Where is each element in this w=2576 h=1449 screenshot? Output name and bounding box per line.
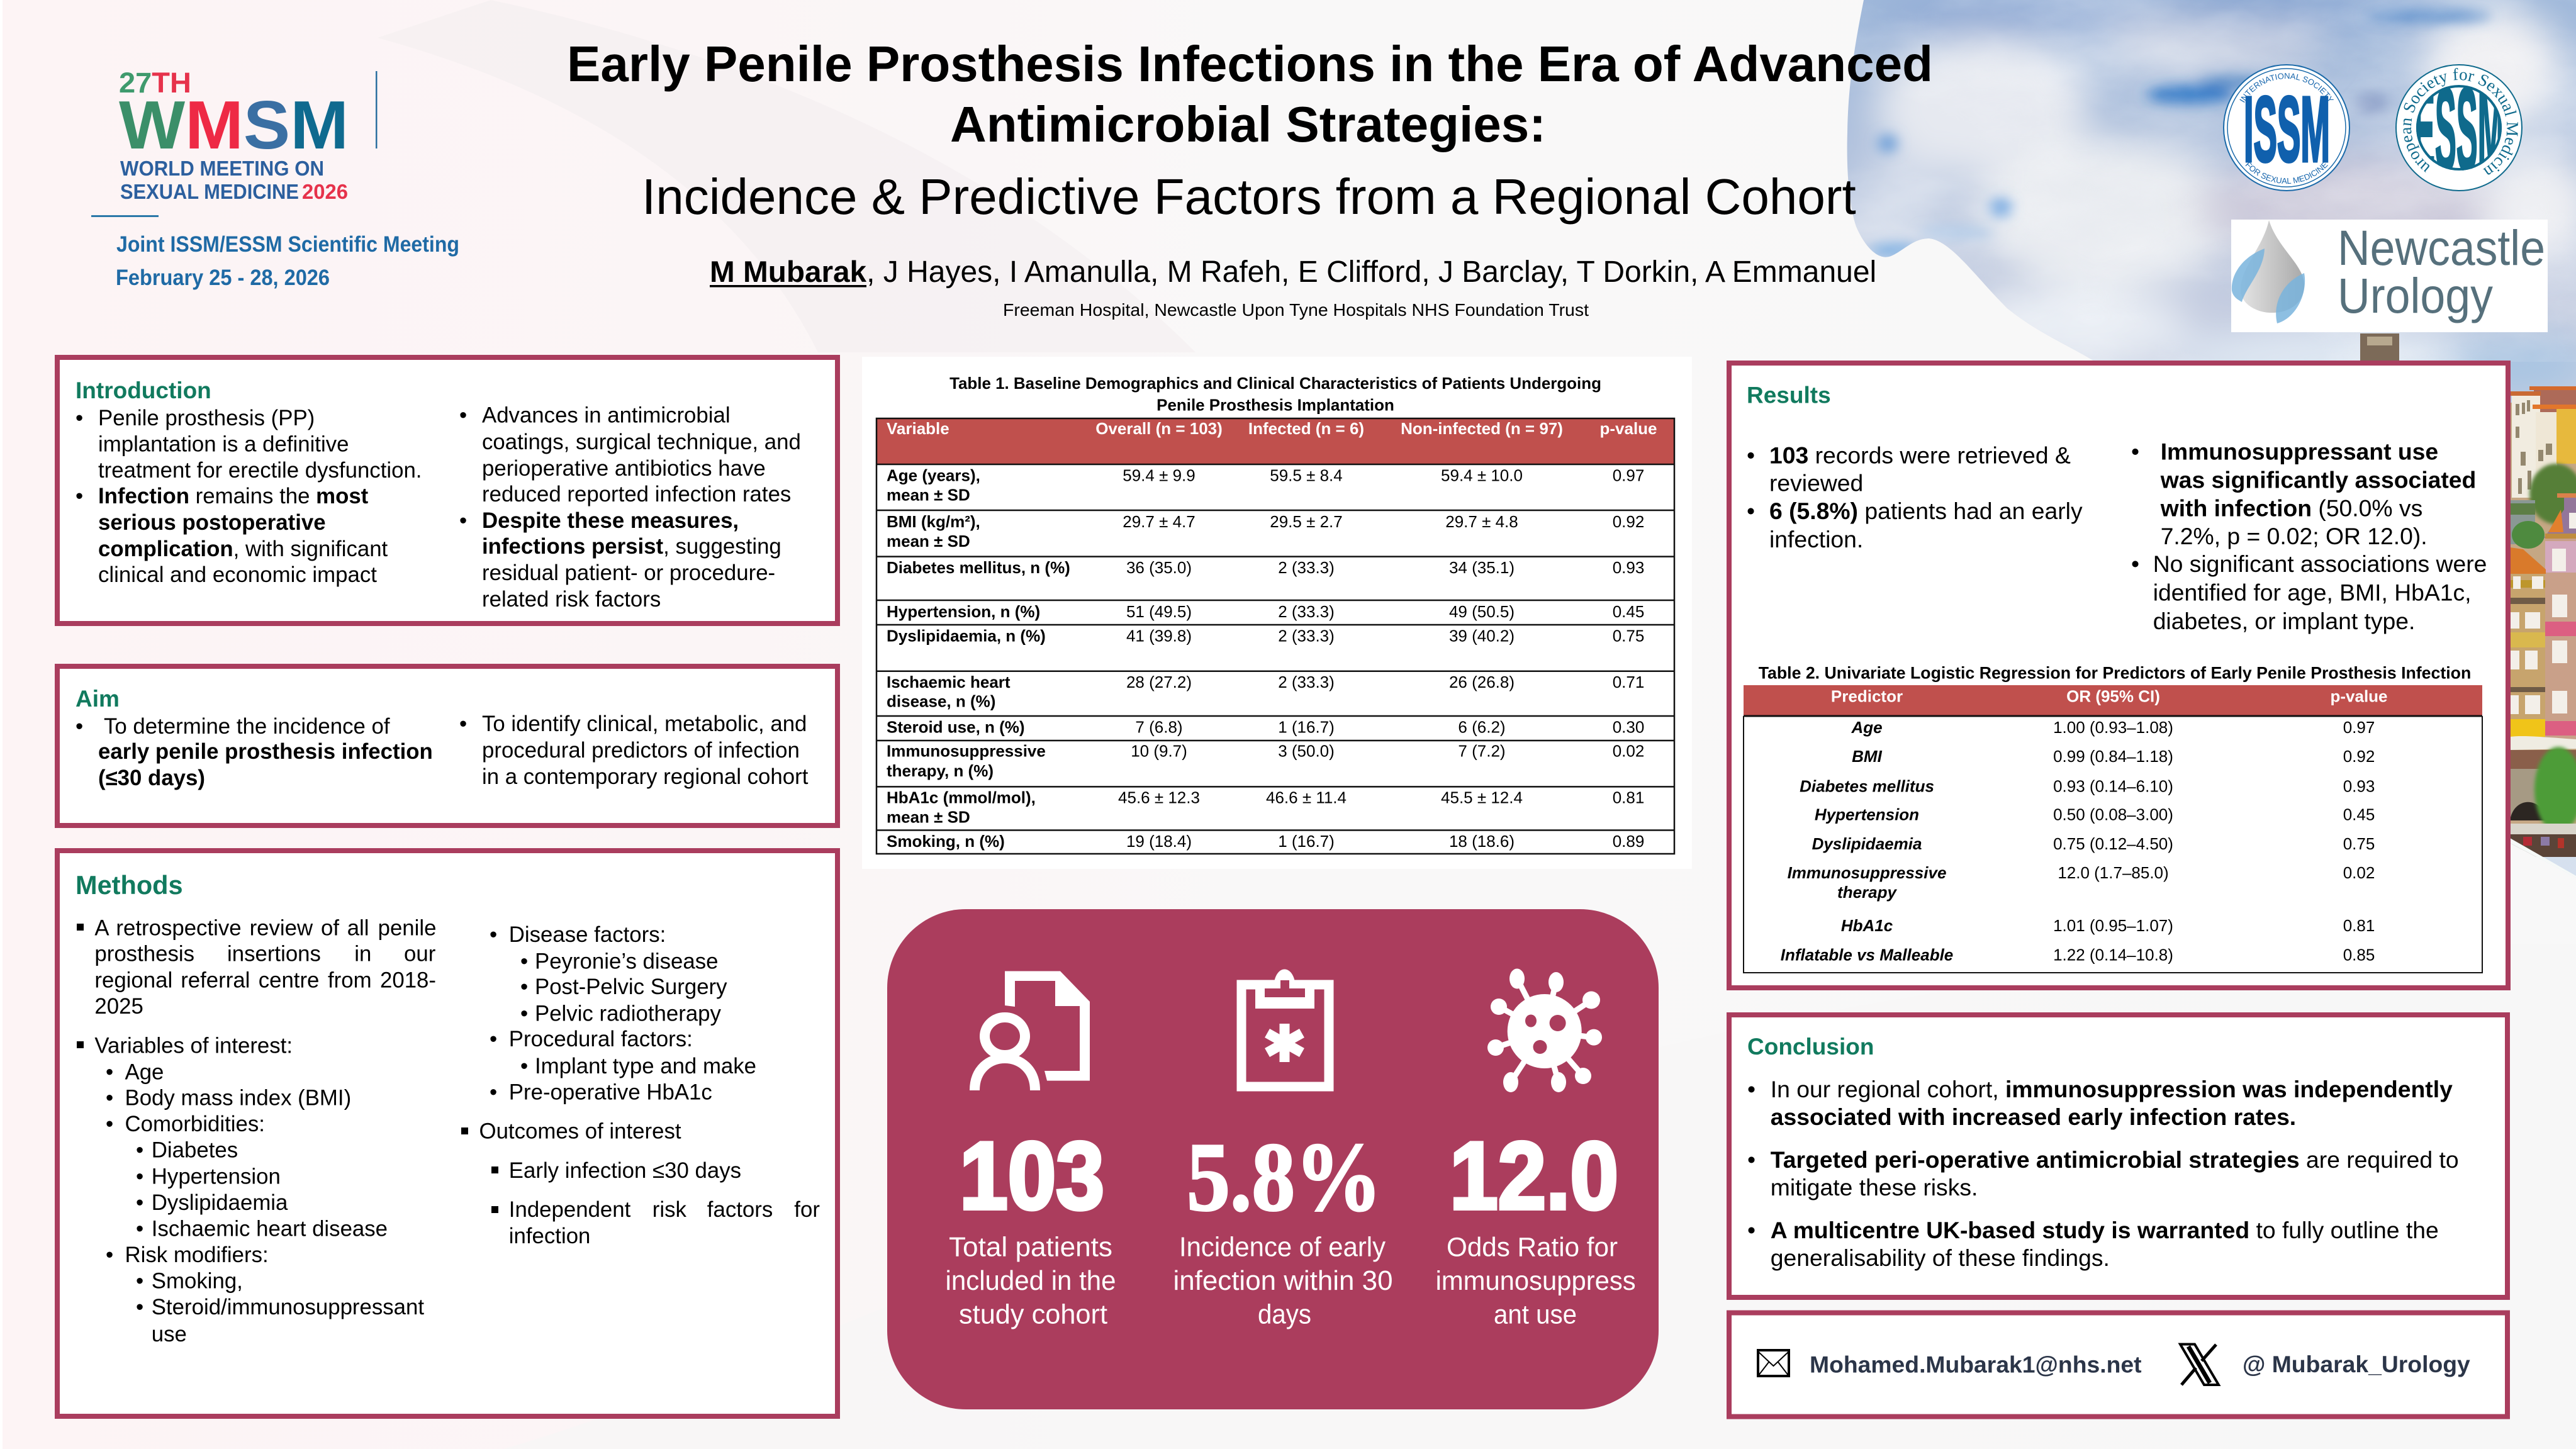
text block: conclusion [1747,1076,2459,1271]
text block: methods left column: • [106,1243,113,1267]
logo: 27th WMSM: 27TH [119,67,191,99]
text block: conclusion: • [1747,1217,1756,1243]
table 1 row labels: mean ± SD [887,486,970,505]
table 1 row labels: Steroid use, n (%) [887,718,1025,737]
table 1 values: 49 (50.5) [1449,602,1515,621]
panel: introduction [57,357,837,624]
table 1 values: 2 (33.3) [1278,627,1335,646]
text block: methods left column: of [321,915,339,940]
table 2 predictors: Inflatable vs Malleable [1781,945,1953,964]
table 1 values: 18 (18.6) [1449,832,1515,851]
text block: introduction left column: implantation is a definitive [98,432,349,457]
table 1 row labels: therapy, n (%) [887,761,994,780]
table 1 header: Overall (n = 103) [1095,419,1223,438]
table 1 values: 0.45 [1613,602,1644,621]
table 2 values: 0.99 (0.84–1.18) [2053,747,2173,766]
text block: results left column: infection. [1769,526,1863,552]
table 1 values: 1 (16.7) [1278,718,1335,737]
logo: 27th WMSM [91,67,459,290]
stat: incidence: infection within 30 [1173,1265,1393,1296]
table 1 values: 36 (35.0) [1126,558,1192,577]
table 1 values: 29.7 ± 4.7 [1123,512,1196,531]
text block: methods left column: Risk modifiers: [125,1243,269,1267]
icon: envelope [1758,1350,1789,1376]
text block: aim right column: • [459,712,467,736]
table 1 values: 19 (18.4) [1126,832,1192,851]
table 2 values: 0.92 [2343,747,2375,766]
table 1 row labels: mean ± SD [887,808,970,827]
title: Early Penile Prosthesis Infections in the Era of Advanced [567,36,1933,92]
text block: introduction left column: • [76,406,83,430]
table 1 values: 34 (35.1) [1449,558,1515,577]
text block: results right column: was significantly associated [2160,467,2476,493]
text block: conclusion: associated with increased early infection rates. [1771,1104,2296,1130]
table 1 header: Infected (n = 6) [1248,419,1364,438]
text block: conclusion: • [1747,1076,1756,1102]
table 1 values: 41 (39.8) [1126,627,1192,646]
table 1 values: 2 (33.3) [1278,673,1335,691]
text block: conclusion: • [1747,1146,1756,1173]
text block: methods left column: Variables of interest: [94,1034,293,1058]
table 1 values: 10 (9.7) [1131,742,1187,761]
text block: introduction right column: • [459,508,467,533]
table 1 title: Table 1. Baseline Demographics and Clinical Characteristics of Patients Undergoing [949,375,1601,393]
table 1 values: 2 (33.3) [1278,558,1335,577]
stat: total patients: Total patients [949,1231,1112,1262]
text block: results left column [1747,442,2083,552]
text block: methods left column: referral [181,968,250,992]
table 1 values: 6 (6.2) [1458,718,1506,737]
text block: introduction left column: Penile prosthesis (PP) [98,406,315,430]
logo: ISSM: FOR SEXUAL MEDICINE [2245,162,2328,184]
table 2 values: 0.45 [2343,805,2375,824]
text block: conclusion: Targeted peri-operative antimicrobial strategies are required to [1771,1146,2459,1173]
table 1 values: 29.5 ± 2.7 [1270,512,1343,531]
icon: X logo [2180,1344,2219,1385]
text block: methods left column: in [354,942,371,966]
table 1 values: 7 (6.8) [1135,718,1183,737]
table 1 values: 7 (7.2) [1458,742,1506,761]
table 2 header: Predictor [1831,687,1903,706]
text block: conclusion: generalisability of these findings. [1771,1245,2110,1271]
table 1 header: Variable [887,419,949,438]
text block: conclusion: mitigate these risks. [1771,1174,1978,1200]
logo: 27th WMSM: WMSM [119,87,349,164]
stat: odds ratio [1436,1122,1636,1330]
heading: methods: Methods [76,870,183,900]
text block: results right column: • [2131,551,2139,577]
table 1 row labels: HbA1c (mmol/mol), [887,788,1036,807]
text block: methods right column: • [520,975,528,999]
text block: methods right column [461,922,820,1248]
logo: 27th WMSM: 2026 [302,180,348,203]
table 2 values: 1.22 (0.14–10.8) [2053,945,2173,964]
table 2 predictors: therapy [1837,883,1897,902]
text block: introduction left column: clinical and economic impact [98,562,377,587]
text block: methods right column: factors [707,1197,773,1222]
text block: introduction right column: reduced reported infection rates [482,482,791,506]
table 2 values: 1.00 (0.93–1.08) [2053,718,2173,737]
text block: methods left column: Dyslipidaemia [152,1190,288,1215]
table 1 values [1118,466,1644,851]
text block: methods right column: Post-Pelvic Surgery [535,975,727,999]
table 2 values: 0.02 [2343,863,2375,882]
text block: introduction right column: perioperative antibiotics have [482,456,766,481]
text block: results right column: diabetes, or implant type. [2153,608,2415,634]
text block: methods left column: A [94,915,109,940]
text block: introduction left column: treatment for erectile dysfunction. [98,458,422,483]
table 2 values: 0.81 [2343,916,2375,935]
text block: introduction right column: related risk factors [482,587,661,612]
table 1 values: 59.4 ± 9.9 [1123,466,1196,485]
logo: ISSM [2223,64,2350,191]
table 1 values: 28 (27.2) [1126,673,1192,691]
text block: results left column: 6 (5.8%) patients had an early [1769,498,2083,524]
sky and city photo [1825,0,2576,893]
text block: methods left column: our [404,942,436,966]
table 2 grid [1744,716,2482,973]
table 1 values: 46.6 ± 11.4 [1266,788,1347,807]
table 2 values: 0.50 (0.08–3.00) [2053,805,2173,824]
table 2 predictors: BMI [1852,747,1883,766]
table 1 row labels: Diabetes mellitus, n (%) [887,558,1070,577]
text block: results left column: 103 records were retrieved & [1769,442,2071,469]
text block: methods left column: Body mass index (BMI) [125,1086,351,1111]
table 1 values: 0.02 [1613,742,1644,761]
table 1 title: Penile Prosthesis Implantation [1156,397,1394,415]
text block: aim right column: in a contemporary regional cohort [482,764,809,789]
table 1 header: Non-infected (n = 97) [1401,419,1563,438]
text block: methods left column: • [136,1269,143,1294]
text block: introduction left column: complication, with significant [98,537,388,561]
table 1 values: 2 (33.3) [1278,602,1335,621]
text block: methods left column [77,915,436,1346]
panel: aim [57,666,837,825]
text block: results right column [2131,439,2487,634]
stat: total patients: 103 [960,1122,1104,1229]
text block: methods left column: from [328,968,372,992]
panel: table 1 [862,357,1692,869]
table 1 values: 39 (40.2) [1449,627,1515,646]
table 2 predictors: Age [1851,718,1883,737]
text block: methods left column: Ischaemic heart disease [152,1217,388,1241]
table 1 values: 0.71 [1613,673,1644,691]
table 2 values: 0.93 [2343,777,2375,796]
text block: aim left column: early penile prosthesis infection [98,739,433,764]
stat: odds ratio: ant use [1494,1300,1577,1330]
stat: total patients: study cohort [959,1299,1107,1330]
stat: odds ratio: Odds Ratio for [1447,1232,1618,1262]
affiliation: Freeman Hospital, Newcastle Upon Tyne Hospitals NHS Foundation Trust [1003,300,1589,320]
table 1 row labels: disease, n (%) [887,692,995,711]
text: ISSM [2244,78,2330,181]
table 1 row labels: Hypertension, n (%) [887,602,1040,621]
text block: aim left column: To determine the incidence of [104,714,390,739]
table 2 predictors: HbA1c [1841,916,1893,935]
table 1 values: 0.89 [1613,832,1644,851]
text block: methods left column: 2025 [94,994,143,1019]
icon: patient record [975,971,1090,1090]
text block: methods right column: • [520,1054,528,1078]
table 1 header [876,418,1674,464]
table 2 header [1744,685,2482,716]
table 1 row labels: Immunosuppressive [887,742,1046,761]
table 1 values: 29.7 ± 4.8 [1445,512,1518,531]
text block: methods right column: • [520,949,528,974]
table 2 predictors: Diabetes mellitus [1800,777,1934,796]
text block: results right column: with infection (50.0% vs [2160,495,2422,522]
text block: methods left column: centre [259,968,319,992]
title: Antimicrobial Strategies: [950,96,1546,152]
stat: total patients [945,1122,1116,1330]
text block: results right column: No significant associations were [2153,551,2487,577]
text block: methods left column: • [136,1190,143,1215]
table 2 header: OR (95% CI) [2066,687,2160,706]
text block: methods left column: • [106,1060,113,1085]
text block: introduction right column: residual patient- or procedure- [482,561,775,585]
table 1 grid [876,418,1674,854]
text block: methods left column: • [136,1217,143,1241]
heading: results: Results [1747,383,1831,408]
text block: methods right column: for [794,1197,820,1222]
heading: aim: Aim [76,686,120,712]
text block: methods right column: • [490,1027,497,1051]
email address: Mohamed.Mubarak1@nhs.net [1810,1351,2142,1378]
social handle: @ Mubarak_Urology [2243,1351,2470,1377]
text block: methods left column: • [106,1086,113,1111]
table 1 values: 0.93 [1613,558,1644,577]
text block: results right column: identified for age, BMI, HbA1c, [2153,579,2472,605]
text block: results left column: • [1747,498,1755,524]
text block: methods right column: Pre-operative HbA1c [509,1080,712,1105]
authors: M Mubarak, J Hayes, I Amanulla, M Rafeh, E Clifford, J Barclay, T Dorkin, A Emmanuel [710,255,1876,289]
stat: incidence: days [1258,1299,1311,1330]
city strip [2510,386,2576,893]
text block: introduction right column: infections persist, suggesting [482,534,781,559]
text block: aim left column [76,714,433,790]
text block: methods left column: • [106,1112,113,1136]
table 2 values: 1.01 (0.95–1.07) [2053,916,2173,935]
text block: results right column: 7.2%, p = 0.02; OR 12.0). [2161,523,2428,549]
title [567,36,1933,152]
text block: methods left column: Diabetes [152,1138,238,1163]
table 2 values: 0.75 [2343,834,2375,853]
table 2 values [2053,718,2375,964]
text block: methods right column: Peyronie’s disease [535,949,718,974]
table 1 row labels: Dyslipidaemia, n (%) [887,627,1046,646]
table 1 row labels: BMI (kg/m²), [887,512,980,531]
table 1 values: 59.4 ± 10.0 [1441,466,1523,485]
text block: methods left column: all [347,915,369,940]
table 1 values: 0.75 [1613,627,1644,646]
table 1 row labels: Smoking, n (%) [887,832,1005,851]
text block: methods left column: Smoking, [152,1269,243,1294]
text block: methods left column: Hypertension [152,1164,281,1189]
text block: methods left column: regional [94,968,172,992]
table 1 values: 45.5 ± 12.4 [1441,788,1523,807]
text block: methods left column: 2018- [380,968,436,992]
table 1 title [949,375,1601,415]
text block: methods right column: Procedural factors: [509,1027,693,1051]
text block: results left column: • [1747,442,1755,469]
table 1 values: 1 (16.7) [1278,832,1335,851]
text block: methods right column: Outcomes of interest [479,1119,681,1143]
table 2 predictors: Dyslipidaemia [1812,834,1922,853]
table 1 values: 0.30 [1613,718,1644,737]
text block: methods right column: Early infection ≤30 days [509,1158,741,1183]
text block: introduction right column: coatings, surgical technique, and [482,430,801,454]
text block: methods left column: use [152,1322,187,1346]
table 2 values: 0.75 (0.12–4.50) [2053,834,2173,853]
table 1 values: 26 (26.8) [1449,673,1515,691]
table 1 values: 3 (50.0) [1278,742,1335,761]
table 1 values: 0.97 [1613,466,1644,485]
table 1 row labels: Ischaemic heart [887,673,1011,691]
text block: methods left column: penile [378,915,436,940]
text block: methods left column: Age [125,1060,164,1085]
icon: medical clipboard [1241,969,1329,1087]
text block: methods right column: • [490,922,497,947]
text block: introduction right column: Despite these measures, [482,508,739,533]
text block: methods right column: Implant type and make [535,1054,756,1078]
text block: aim right column: procedural predictors of infection [482,738,800,763]
text block: aim left column: (≤30 days) [98,766,205,790]
stat: incidence: 5.8% [1187,1122,1382,1231]
table 2 values: 12.0 (1.7–85.0) [2058,863,2169,882]
table 1 row labels: Age (years), [887,466,980,485]
text block: introduction right column [459,403,801,612]
table 2 predictors: Hypertension [1815,805,1919,824]
logo: 27th WMSM: SEXUAL MEDICINE [120,180,299,203]
table 2 values: 0.97 [2343,718,2375,737]
panel: conclusion [1729,1015,2507,1297]
stat: incidence: Incidence of early [1179,1231,1386,1262]
logo: 27th WMSM: Joint ISSM/ESSM Scientific Meeting [116,232,459,257]
stat: total patients: included in the [945,1265,1116,1296]
logo: Newcastle Urology: Urology [2338,267,2493,323]
text block: results right column: Immunosuppressant use [2161,439,2438,465]
logo: ESSM [2395,64,2523,191]
stat: odds ratio: immunosuppress [1436,1266,1636,1296]
text block: introduction left column: serious postoperative [98,510,326,535]
panel: methods [57,851,837,1416]
text block: aim left column: • [76,714,83,739]
table 2 header: p-value [2330,687,2388,706]
text block: methods right column: Independent [509,1197,631,1222]
text block: results right column: • [2131,439,2139,465]
text block: aim right column: To identify clinical, metabolic, and [482,712,807,736]
text block: methods left column: review [250,915,313,940]
table 2 predictors [1781,718,1953,964]
subtitle: Incidence & Predictive Factors from a Regional Cohort [642,169,1856,225]
table 2 title: Table 2. Univariate Logistic Regression for Predictors of Early Penile Prosthesis Infection [1759,664,2471,683]
table 1 values: 45.6 ± 12.3 [1118,788,1200,807]
text block: conclusion: A multicentre UK-based study is warranted to fully outline the [1771,1217,2439,1243]
table 2 values: 0.85 [2343,945,2375,964]
text block: methods left column: • [136,1138,143,1163]
text block: methods left column: Comorbidities: [125,1112,265,1136]
text block: methods right column: infection [509,1224,590,1248]
text block: methods left column: insertions [227,942,321,966]
table 1 row labels: mean ± SD [887,532,970,551]
text block: methods right column: Pelvic radiotherapy [535,1002,722,1026]
table 1 values: 0.81 [1613,788,1644,807]
text block: conclusion: In our regional cohort, immunosuppression was independently [1771,1076,2453,1102]
text block: methods left column: Steroid/immunosuppressant [152,1295,424,1319]
text block: introduction right column: • [459,403,467,428]
stat: incidence [1173,1122,1393,1330]
table 1 row labels [887,466,1070,851]
text block: results left column: reviewed [1769,470,1863,496]
panel: key statistics [887,909,1659,1409]
logo: Newcastle Urology [2231,220,2548,332]
heading: conclusion: Conclusion [1747,1034,1874,1060]
text block: aim right column [459,712,809,789]
text block: introduction left column [76,406,422,587]
text block: methods right column: • [520,1002,528,1026]
text block: introduction right column: Advances in antimicrobial [482,403,731,428]
table 1 values: 59.5 ± 8.4 [1270,466,1343,485]
text block: methods left column: retrospective [116,915,242,940]
panel: results [1729,363,2508,988]
text block: methods left column: prosthesis [94,942,194,966]
logo: ISSM: INTERNATIONAL SOCIETY [2239,73,2334,103]
table 1 header: p-value [1599,419,1657,438]
text block: methods right column: • [490,1080,497,1105]
text block: methods left column: • [136,1295,143,1319]
table 1 values: 0.92 [1613,512,1644,531]
icon: virus [1487,969,1602,1092]
text block: methods right column: risk [652,1197,687,1222]
text block: introduction left column: • [76,484,83,508]
text block: methods left column: • [136,1164,143,1189]
text block: introduction left column: Infection remains the most [98,484,369,508]
logo: Newcastle Urology: Newcastle [2338,220,2545,276]
table 2 predictors: Immunosuppressive [1788,863,1946,882]
logo: 27th WMSM: February 25 - 28, 2026 [116,266,330,290]
stat: odds ratio: 12.0 [1450,1122,1618,1229]
heading: introduction: Introduction [76,378,211,403]
text block: methods right column: Disease factors: [509,922,666,947]
panel: contact [1729,1312,2507,1417]
logo: 27th WMSM: WORLD MEETING ON [120,157,324,180]
table 2 values: 0.93 (0.14–6.10) [2053,777,2173,796]
table 1 values: 51 (49.5) [1126,602,1192,621]
